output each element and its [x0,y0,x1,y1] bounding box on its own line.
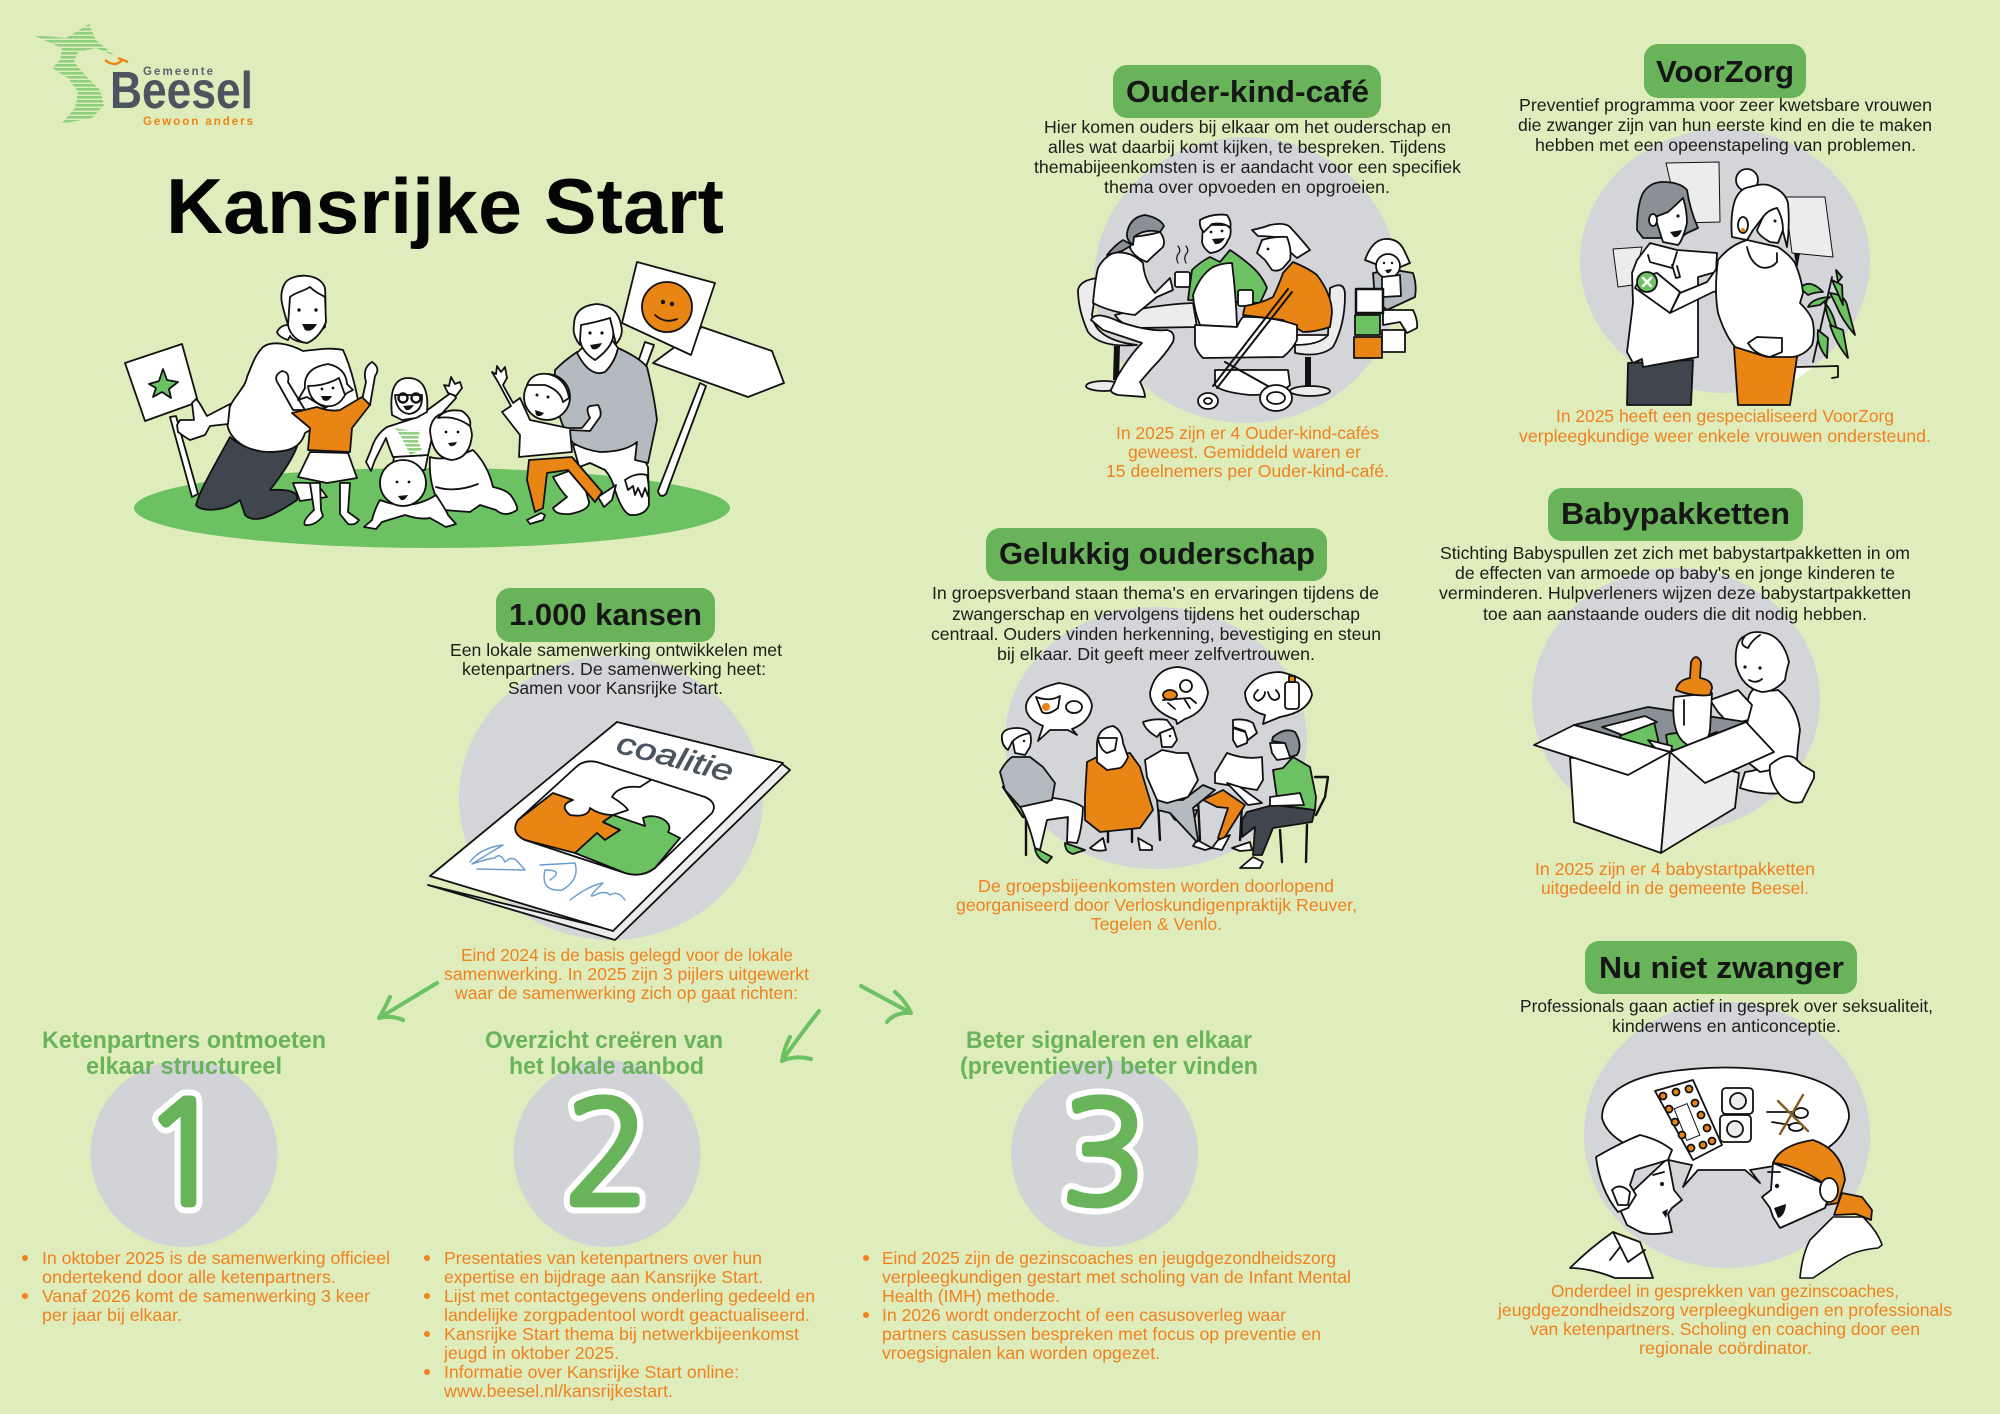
child with glasses [366,377,462,471]
pillar 2 heading: Overzicht creëren van [485,1027,723,1054]
pillar 2 heading: het lokale aanbod [509,1053,704,1080]
title: Kansrijke Start [166,162,724,250]
illustration: baby with open box [1534,632,1814,853]
text: 1.000 kansen outcome: waar de samenwerking zich op gaat richten: [454,983,798,1003]
puzzle shape [515,761,714,875]
right woman [1243,224,1332,345]
background circle [1005,607,1307,869]
centre man [1188,215,1267,306]
description: Stichting Babyspullen zet zich met babystartpakketten in om [1440,543,1910,563]
description [931,583,1381,664]
logo: Gemeente Beesel: Gemeente [143,66,213,78]
logo: Gemeente Beesel [33,24,253,128]
illustration: parents at a table with stroller [1078,215,1417,411]
pillar 2 bullets [424,1248,815,1401]
text: 1.000 kansen outcome [444,945,809,1003]
woman [1762,1140,1882,1278]
outcome: De groepsbijeenkomsten worden doorlopend [978,876,1334,896]
signatures [470,845,625,900]
description: kinderwens en anticonceptie. [1612,1016,1841,1036]
pillar 1 heading: Ketenpartners ontmoeten [42,1027,326,1054]
description: bij elkaar. Dit geeft meer zelfvertrouwen. [997,644,1315,664]
description: centraal. Ouders vinden herkenning, bevestiging en steun [931,624,1381,644]
pillar 3 heading: Beter signaleren en elkaar [966,1027,1252,1054]
pill strip [1655,1080,1722,1160]
panel: Gelukkig ouderschap [931,528,1381,934]
outcome: In 2025 heeft een gespecialiseerd VoorZorg [1556,406,1894,426]
pillar 1 bullets [22,1248,390,1325]
pillar 2 bullets: www.beesel.nl/kansrijkestart. [443,1381,673,1401]
description: toe aan aanstaande ouders die dit nodig hebben. [1483,604,1867,624]
pillar 2 bullets: Lijst met contactgegevens onderling gedeeld en [444,1286,815,1306]
ground ellipse [134,468,730,548]
pillar 3 bullets [863,1248,1351,1363]
logo: Gemeente Beesel: Beesel [110,62,253,120]
pillar 3 bullets: Health (IMH) methode. [882,1286,1060,1306]
arrow to pillar 3 [861,986,911,1022]
panel: Ouder-kind-café [1034,65,1461,481]
pillar 1 heading [42,1027,326,1080]
number circle 1 [90,1060,278,1247]
panel: VoorZorg [1518,44,1932,446]
heading pill: Babypakketten [1561,496,1790,531]
crawling baby [364,460,456,529]
outcome: regionale coördinator. [1639,1338,1812,1358]
illustration: conversation about contraception [1570,1068,1882,1278]
heading pill [1548,488,1803,541]
pillar 3 bullets: In 2026 wordt onderzocht of een casusoverleg waar [882,1305,1286,1325]
pillar 2 bullets: expertise en bijdrage aan Kansrijke Start. [444,1267,763,1287]
pillar 2 bullets: Informatie over Kansrijke Start online: [444,1362,739,1382]
description [1034,117,1461,197]
description [1518,95,1932,155]
description: zwangerschap en vervolgens tijdens het ouderschap [952,604,1360,624]
baby [1710,632,1814,803]
person 1 [1000,728,1085,863]
pillar 1 bullets: per jaar bij elkaar. [42,1305,182,1325]
heading pill: Gelukkig ouderschap [999,536,1315,571]
pillar 3 bullets: Eind 2025 zijn de gezinscoaches en jeugdgezondheidszorg [882,1248,1336,1268]
description: thema over opvoeden en opgroeien. [1104,177,1390,197]
pillar 2 heading [485,1027,723,1080]
stroller [1193,263,1297,411]
description: Hier komen ouders bij elkaar om het ouderschap en [1044,117,1451,137]
father [553,304,657,515]
outcome: geweest. Gemiddeld waren er [1128,442,1361,462]
sitting baby [430,410,517,514]
outcome [1106,423,1389,481]
pillar 3 heading [960,1027,1258,1080]
pillar 2 [424,1027,815,1401]
outcome: 15 deelnemers per Ouder-kind-café. [1106,461,1389,481]
pillar 1 bullets: Vanaf 2026 komt de samenwerking 3 keer [42,1286,370,1306]
pillar 3 bullets: verpleegkundigen gestart met scholing van de Infant Mental [882,1267,1351,1287]
number 1: 1 [141,1083,227,1225]
outcome [1535,859,1815,898]
number 2: 2 [564,1083,650,1225]
description [1439,543,1911,624]
plant [1800,270,1855,362]
heading pill: Ouder-kind-café [1126,74,1369,109]
pillar 2 bullets: jeugd in oktober 2025. [443,1343,619,1363]
heading pill [986,528,1327,581]
number 3: 3 [1061,1083,1147,1225]
arrow to pillar 2 [782,1011,819,1061]
person 4 [1203,719,1263,850]
description: Preventief programma voor zeer kwetsbare vrouwen [1519,95,1932,115]
illustration: parents group in a circle [1000,667,1328,868]
speech bubbles [1026,667,1312,741]
toddler and blocks [1354,239,1417,358]
outcome: verpleegkundige weer enkele vrouwen ondersteund. [1519,426,1931,446]
text: 1.000 kansen intro: ketenpartners. De samenwerking heet: [462,659,766,679]
text: 1.000 kansen intro: Een lokale samenwerking ontwikkelen met [450,640,782,660]
description: Professionals gaan actief in gesprek over seksualiteit, [1520,996,1933,1016]
description: de effecten van armoede op baby's en jonge kinderen te [1455,563,1895,583]
pill heading: 1.000 kansen [496,588,715,642]
number circle 2 [514,1060,700,1247]
circle: 1.000 kansen background [459,656,763,940]
outcome [1519,406,1931,446]
pillar 2 bullets: Kansrijke Start thema bij netwerkbijeenkomst [444,1324,799,1344]
outcome: Tegelen & Venlo. [1091,914,1222,934]
outcome: uitgedeeld in de gemeente Beesel. [1541,878,1809,898]
box interior [1574,707,1746,752]
number 1: 1 [141,1083,227,1225]
mother [177,276,358,519]
girl [276,362,377,525]
description: In groepsverband staan thema's en ervaringen tijdens de [932,583,1379,603]
panel: Babypakketten [1439,488,1911,898]
outcome: georganiseerd door Verloskundigenpraktijk Reuver, [956,895,1357,915]
logo: Gemeente Beesel: Gewoon anders [143,116,253,128]
outcome: Onderdeel in gesprekken van gezinscoaches, [1551,1281,1899,1301]
panel: Nu niet zwanger [1497,941,1952,1358]
outcome [956,876,1357,934]
number 3: 3 [1061,1083,1147,1225]
background circle [1532,568,1820,832]
posters and table [1613,162,1838,382]
person 3 [1143,719,1215,850]
man [1570,1135,1682,1278]
heading pill [1113,65,1381,118]
background circle [1094,137,1398,423]
condom packs [1720,1088,1753,1142]
nurse [1627,182,1733,405]
outcome [1497,1281,1952,1358]
background circle [1580,129,1870,393]
box faces [1570,752,1670,853]
pillar 1 heading: elkaar structureel [86,1053,282,1080]
illustration: coalition document with puzzle [428,722,790,940]
person 5 [1232,730,1316,868]
number 2: 2 [564,1083,650,1225]
right signs [622,262,784,496]
document title: coalitie [613,727,737,789]
description: verminderen. Hulpverleners wijzen deze babystartpakketten [1439,583,1911,603]
pillar 1 bullets: ondertekend door alle ketenpartners. [42,1267,336,1287]
text: 1.000 kansen outcome: Eind 2024 is de basis gelegd voor de lokale [461,945,793,965]
pillar 3 [863,1027,1351,1363]
left star sign [125,344,198,497]
person 2 [1085,726,1153,851]
background circle [1584,1002,1870,1268]
outcome: In 2025 zijn er 4 babystartpakketten [1535,859,1815,879]
speech bubble [1602,1068,1849,1187]
outcome: In 2025 zijn er 4 Ouder-kind-cafés [1116,423,1379,443]
pillar 2 bullets: landelijke zorgpadentool wordt geactualiseerd. [444,1305,810,1325]
pillar 1 [22,1027,390,1325]
chairs and table [1078,278,1345,396]
description: themabijeenkomsten is er aandacht voor een specifiek [1034,157,1461,177]
heading pill: VoorZorg [1656,54,1794,89]
hero illustration: family with signs [125,262,784,548]
boy [492,366,616,524]
heading pill [1644,44,1806,98]
arrow to pillar 1 [379,983,437,1020]
number circle 3 [1011,1060,1198,1247]
outcome: van ketenpartners. Scholing en coaching door een [1530,1319,1920,1339]
text: 1.000 kansen intro: Samen voor Kansrijke Start. [508,678,723,698]
heading pill [1585,941,1857,994]
pillar 3 heading: (preventiever) beter vinden [960,1053,1258,1080]
heading pill: Nu niet zwanger [1599,950,1844,985]
description: die zwanger zijn van hun eerste kind en die te maken [1518,115,1932,135]
bottle [1673,657,1712,746]
description [1520,996,1933,1036]
outcome: jeugdgezondheidszorg verpleegkundigen en professionals [1497,1300,1952,1320]
crossed sperm [1767,1095,1808,1134]
left woman [1091,215,1190,397]
chairs [1003,777,1328,862]
description: hebben met een opeenstapeling van problemen. [1535,135,1916,155]
pillar 1 bullets: In oktober 2025 is de samenwerking officieel [42,1248,390,1268]
pregnant woman [1716,169,1814,405]
pill heading: 1.000 kansen: 1.000 kansen [509,597,702,632]
illustration: nurse and pregnant woman [1613,162,1855,405]
text: 1.000 kansen intro [450,640,782,698]
description: alles wat daarbij komt kijken, te bespreken. Tijdens [1048,137,1446,157]
pillar 3 bullets: vroegsignalen kan worden opgezet. [882,1343,1160,1363]
text: 1.000 kansen outcome: samenwerking. In 2025 zijn 3 pijlers uitgewerkt [444,964,809,984]
pillar 2 bullets: Presentaties van ketenpartners over hun [444,1248,762,1268]
pillar 3 bullets: partners casussen bespreken met focus op preventie en [882,1324,1321,1344]
